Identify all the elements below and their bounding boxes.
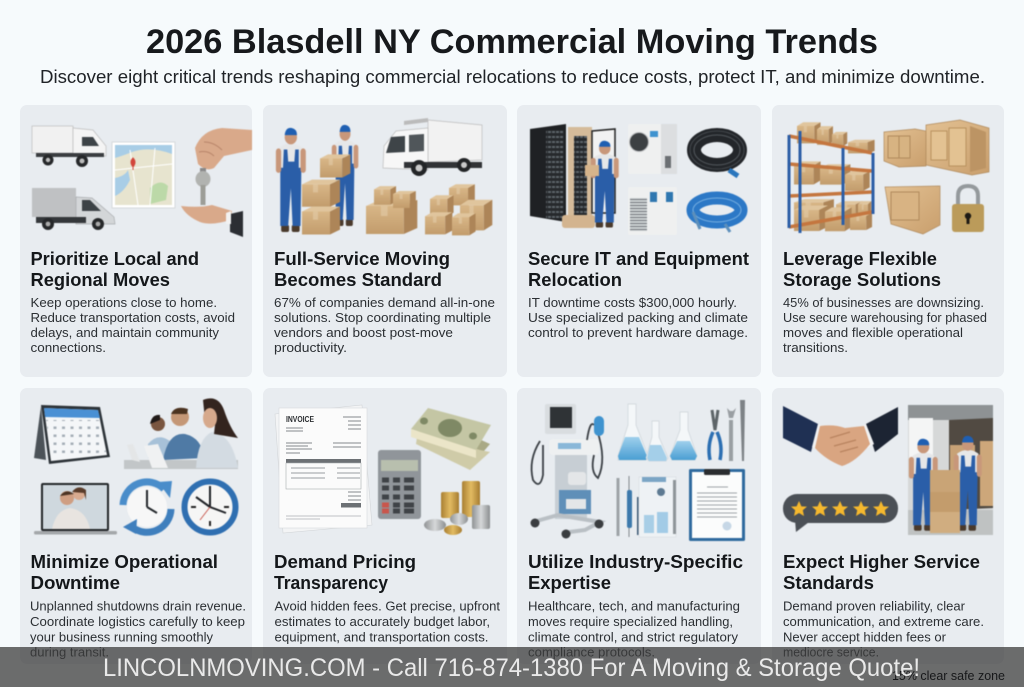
icon: handshake	[783, 406, 898, 466]
heading	[30, 249, 199, 290]
body text: connections.	[30, 341, 106, 355]
panel: prioritize local and regional moves	[20, 105, 252, 377]
body text: 67% of companies demand all-in-one	[274, 296, 495, 310]
icon: server rack with mover	[530, 124, 619, 228]
body text: Keep operations close to home.	[30, 296, 217, 310]
body text: IT downtime costs $300,000 hourly.	[528, 296, 737, 310]
heading: Leverage Flexible	[783, 249, 937, 269]
icon: stacked boxes	[366, 184, 492, 235]
panel: secure IT and equipment	[517, 105, 761, 377]
image: movers at truck	[908, 405, 993, 535]
icon: padlock	[952, 186, 984, 232]
subtitle: Discover eight critical trends reshaping commercial relocations to reduce costs, protect IT, and minimize downtime.	[40, 67, 985, 87]
body text: mediocre service.	[783, 646, 879, 660]
heading: Utilize Industry-Specific	[528, 552, 743, 572]
body text: vendors and boost post-move	[274, 326, 453, 340]
body text: Unplanned shutdowns drain revenue.	[30, 600, 246, 614]
footer band	[0, 647, 1024, 687]
icon: flasks	[618, 404, 697, 461]
heading	[783, 552, 980, 593]
icon: medical cart	[530, 404, 604, 538]
body text: control to prevent hardware damage.	[528, 326, 748, 340]
icon: refresh clock	[123, 481, 172, 534]
body text	[30, 600, 246, 660]
icon: clipboard	[689, 469, 745, 541]
icon: invoice: INVOICE	[286, 414, 314, 424]
heading	[783, 249, 941, 290]
body text: Healthcare, tech, and manufacturing	[528, 600, 740, 614]
icon: wall clock	[184, 482, 236, 532]
heading: Expect Higher Service	[783, 552, 980, 572]
icon: white truck	[383, 118, 482, 176]
heading	[528, 249, 749, 290]
body text	[783, 600, 984, 660]
body text: solutions. Stop coordinating multiple	[274, 311, 491, 325]
icon: map	[112, 142, 175, 208]
body text: Use specialized packing and climate	[528, 311, 748, 325]
icon: video call laptop	[34, 483, 117, 534]
body text: Never accept hidden fees or	[783, 630, 946, 644]
panel: flexible storage	[772, 105, 1004, 377]
heading	[528, 552, 743, 593]
body text: climate control, and strict regulatory	[528, 630, 739, 644]
icon: air conditioners	[628, 124, 677, 235]
icon: blue cable coil	[693, 198, 741, 232]
heading: Minimize Operational	[30, 552, 218, 572]
body text: delays, and maintain community	[30, 326, 220, 340]
heading: Full-Service Moving	[274, 249, 450, 269]
panel: minimize downtime	[20, 388, 252, 664]
body text: Use secure warehousing for phased	[783, 311, 987, 325]
body text	[30, 296, 235, 355]
body text: Avoid hidden fees. Get precise, upfront	[274, 600, 501, 614]
safe zone note: 15% clear safe zone	[892, 669, 1005, 683]
body text: compliance protocols.	[528, 646, 655, 660]
image: call center team	[124, 398, 238, 469]
heading	[274, 249, 450, 290]
body text: Reduce transportation costs, avoid	[30, 311, 235, 325]
icon: calculator	[378, 450, 421, 519]
icon: two movers with boxes	[276, 125, 358, 235]
icon: warehouse shelves	[789, 122, 875, 233]
footer call to action: LINCOLNMOVING.COM - Call 716-874-1380 For A Moving & Storage Quote!	[103, 654, 920, 682]
heading: Prioritize Local and	[30, 249, 199, 269]
panel: industry expertise	[517, 388, 761, 664]
body text: equipment, and transportation costs.	[274, 630, 488, 644]
icon: black cable coil	[690, 131, 744, 176]
body text	[783, 296, 987, 355]
icon: hand tools	[709, 400, 745, 461]
title: 2026 Blasdell NY Commercial Moving Trends	[146, 23, 878, 61]
body text	[528, 296, 748, 340]
heading	[274, 552, 416, 593]
body text: Coordinate logistics carefully to keep	[30, 615, 245, 629]
body text: your business running smoothly	[30, 630, 214, 644]
body text: 45% of businesses are downsizing.	[783, 296, 984, 310]
body text: estimates to accurately budget labor,	[274, 615, 490, 629]
icon: rating bubble with stars	[783, 494, 898, 532]
panel: higher service standards	[772, 388, 1004, 664]
icon: wooden crates	[884, 120, 989, 234]
body text: productivity.	[274, 341, 347, 355]
body text: transitions.	[783, 341, 848, 355]
icon: invoice	[275, 405, 372, 533]
heading	[30, 552, 218, 593]
panel: pricing transparency	[263, 388, 507, 664]
body text	[528, 600, 740, 660]
icon: money stacks	[411, 408, 491, 470]
icon: calendar tablet	[34, 405, 110, 464]
heading: Secure IT and Equipment	[528, 249, 749, 269]
heading: Relocation	[528, 270, 622, 290]
heading: Demand Pricing	[274, 552, 416, 572]
icon: hand with key	[181, 128, 252, 237]
heading: Standards	[783, 573, 874, 593]
icon: box truck	[32, 126, 106, 167]
body text: moves require specialized handling,	[528, 615, 733, 629]
heading: Becomes Standard	[274, 270, 442, 290]
body text: Demand proven reliability, clear	[783, 600, 965, 614]
heading: Downtime	[30, 573, 120, 593]
body text: during transit.	[30, 646, 109, 660]
icon: coins	[424, 481, 490, 535]
body text	[274, 600, 501, 644]
body text: moves and flexible operational	[783, 326, 963, 340]
heading: Storage Solutions	[783, 270, 941, 290]
icon: delivery van	[32, 188, 115, 230]
icon: instruments	[616, 476, 676, 537]
body text	[274, 296, 495, 355]
heading: Transparency	[274, 573, 389, 593]
panel: full-service moving	[263, 105, 507, 377]
heading: Expertise	[528, 573, 611, 593]
body text: communication, and extreme care.	[783, 615, 984, 629]
heading: Regional Moves	[30, 270, 170, 290]
